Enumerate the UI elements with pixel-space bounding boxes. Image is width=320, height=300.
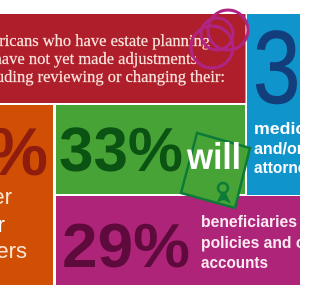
beneficiaries label: [201, 212, 320, 272]
beneficiaries label: accounts: [201, 253, 268, 272]
panel: power of attorney: [0, 105, 53, 285]
intro text: [0, 31, 225, 86]
medical label: [254, 119, 320, 177]
panel: will: [56, 105, 245, 194]
stat: 29 percent: 29%: [62, 212, 190, 281]
panel: beneficiaries: [56, 196, 320, 285]
stat: medical percent: 3: [253, 10, 300, 126]
orange label: [0, 184, 27, 263]
icon: will document: [181, 133, 250, 208]
panel: medical: [247, 10, 320, 195]
icon: interlocking rings: [191, 10, 248, 68]
stat: 33 percent: 33%: [59, 116, 183, 185]
label: will: will: [186, 136, 241, 177]
panel: intro: [0, 14, 246, 103]
